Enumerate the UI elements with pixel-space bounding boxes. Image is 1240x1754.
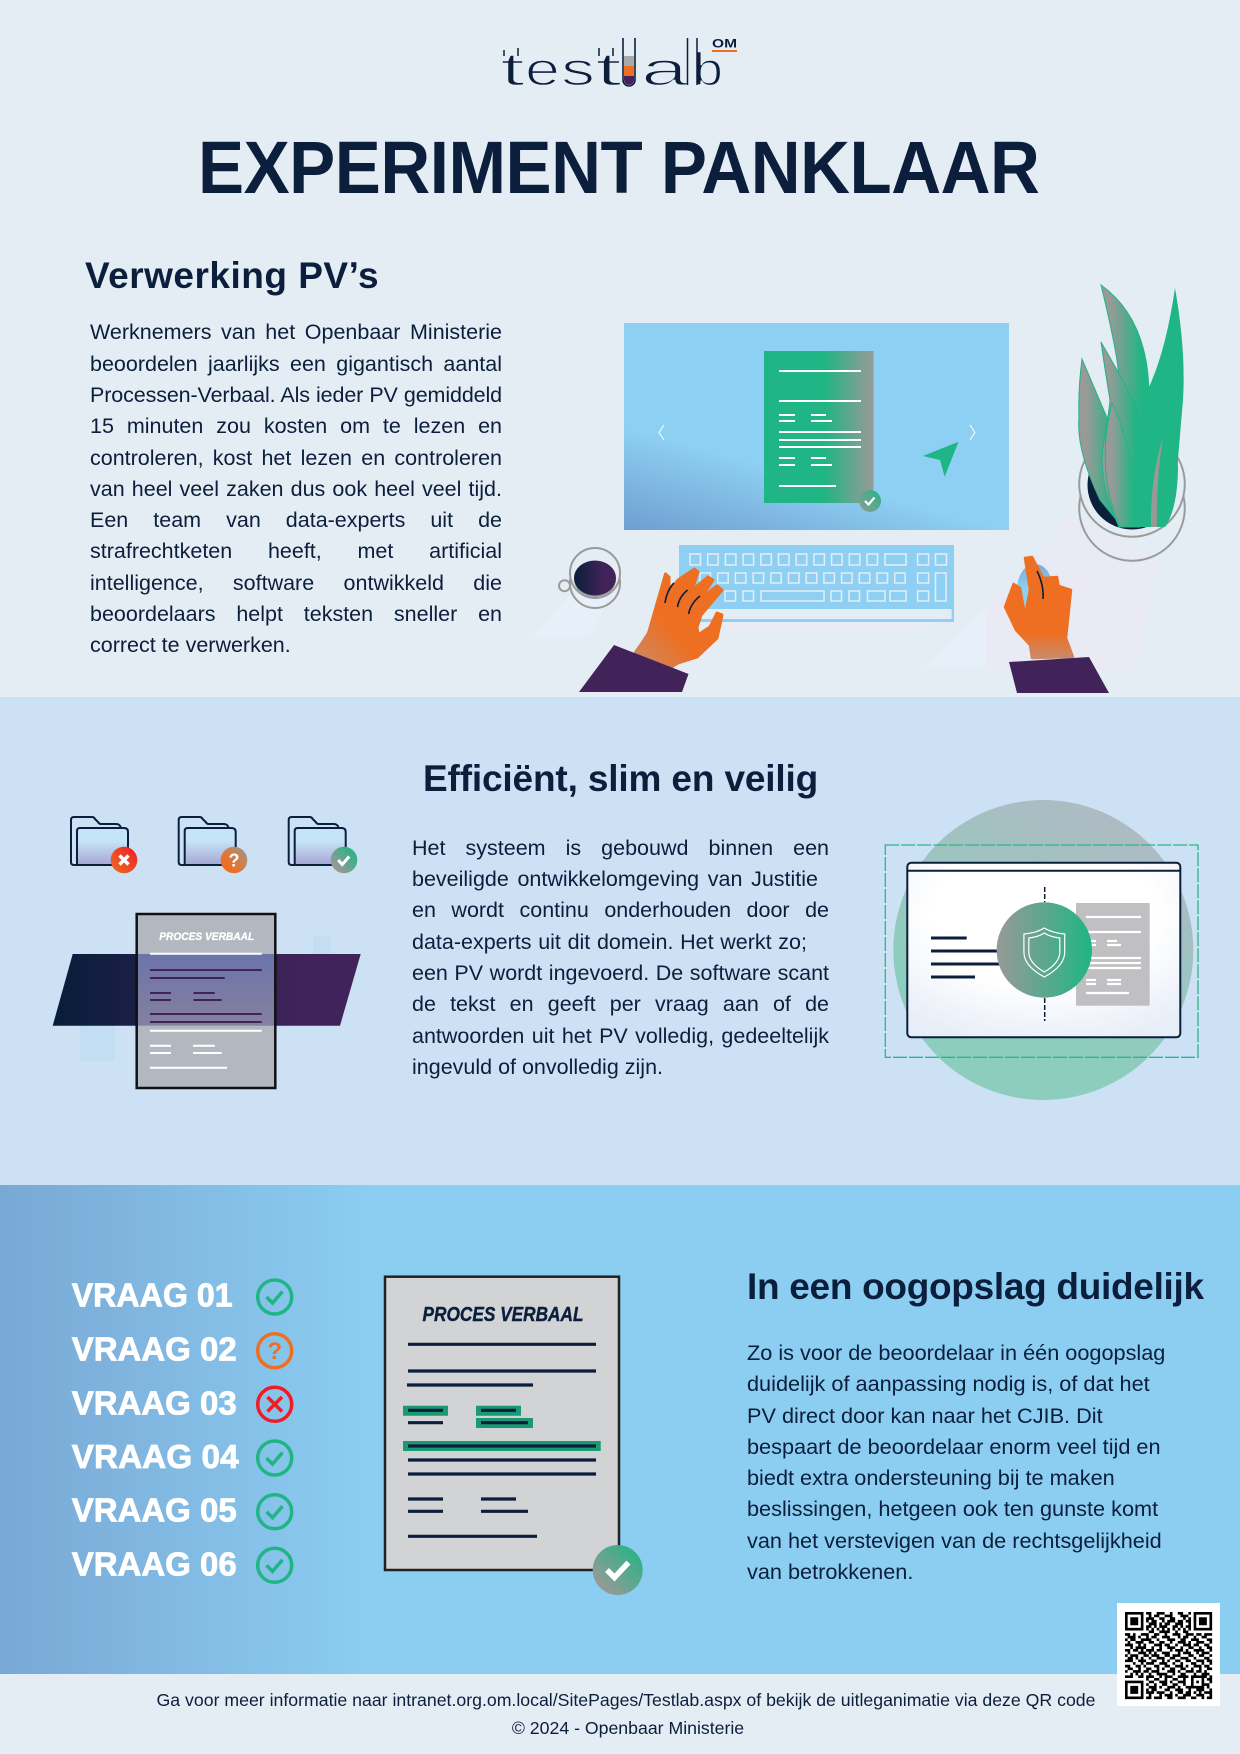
text block: beoordelaar: PV direct door kan naar het CJIB. Dit [747,1403,1103,1428]
panel: efficient, slim en veilig [0,697,1240,1185]
panel: footer [0,1674,1240,1754]
text block: beoordelaar: Zo is voor de beoordelaar in één oogopslag [747,1340,1165,1365]
proces verbaal with scanning band [53,914,361,1088]
text block: intro: strafrechtketen heeft, met artificial [90,539,502,563]
text block: intro: beoordelaars helpt teksten sneller en [90,602,502,626]
logo: testlab OM: s [561,43,595,95]
text block: systeem: Het systeem is gebouwd binnen een [412,836,829,860]
question checklist: VRAAG 06 [72,1545,237,1582]
title: EXPERIMENT PANKLAAR [198,126,1039,209]
logo: testlab OM: e [525,43,560,95]
text block: intro: van heel veel zaken dus ook heel veel tijd. [90,477,502,501]
approved check [593,1545,643,1595]
text block: intro: Processen-Verbaal. Als ieder PV gemiddeld [90,383,502,407]
logo: testlab OM: t [595,43,622,95]
left arm and hand [579,569,722,692]
text block: beoordelaar: van het verstevigen van de rechtsgelijkheid [747,1528,1162,1553]
logo: testlab OM: t [500,43,525,95]
illustration: desk with computer [558,284,1186,693]
text block: systeem: een PV wordt ingevoerd. De software scant [412,961,829,985]
proces verbaal with scanning band: PROCES VERBAAL [159,931,254,943]
logo: testlab OM: a [641,43,689,95]
text block: systeem: antwoorden uit het PV volledig, gedeeltelijk [412,1024,829,1048]
question checklist: VRAAG 03 [72,1384,237,1421]
proces verbaal document with highlights: PROCES VERBAAL [422,1304,584,1326]
text block: beoordelaar: bespaart de beoordelaar enorm veel tijd en [747,1434,1161,1459]
heading: In een oogopslag duidelijk: In een oogopslag duidelijk [747,1266,1204,1307]
logo: testlab OM [500,36,737,95]
text block: intro: 15 minuten zou kosten om te lezen en [90,414,502,438]
security illustration [885,800,1198,1100]
copyright: © 2024 - Openbaar Ministerie [512,1718,744,1738]
monitor [624,323,1009,530]
folder rejected [71,817,137,873]
text block: intro: beoordelen jaarlijks een gigantisch aantal [90,352,502,376]
keyboard [679,545,954,622]
question checklist [72,1277,292,1582]
question list and document [71,1275,643,1595]
text block: beoordelaar: biedt extra ondersteuning bij te maken [747,1465,1115,1490]
coffee cup [559,548,620,608]
question checklist: ? [267,1338,282,1365]
background shapes [532,516,1158,670]
cursor arrow [923,442,958,477]
text block: beoordelaar: beslissingen, hetgeen ook ten gunste komt [747,1496,1158,1521]
QR code [1117,1603,1220,1706]
proces verbaal document with highlights [385,1277,643,1595]
text block: intro: correct te verwerken. [90,633,291,657]
text block: systeem: data-experts uit dit domein. Het werkt zo; [412,930,807,954]
folder question: ? [228,850,240,870]
text block: systeem: ingevuld of onvolledig zijn. [412,1055,663,1079]
right arm, hand and mouse [1005,557,1109,693]
heading: Efficiënt, slim en veilig: Efficiënt, slim en veilig [423,758,818,799]
illustrations: folders, document and shield [52,800,1199,1100]
text block: beoordelaar [747,1340,1165,1584]
question checklist: VRAAG 04 [72,1438,239,1475]
text block: systeem: beveiligde ontwikkelomgeving van Justitie [412,867,818,891]
question checklist: VRAAG 01 [72,1277,233,1314]
text block: intro: controleren, kost het lezen en controleren [90,446,502,470]
text block: systeem: en wordt continu onderhouden door de [412,898,829,922]
document on screen [764,351,881,512]
logo: testlab OM: OM [712,36,737,50]
footer link text: Ga voor meer informatie naar intranet.org.om.local/SitePages/Testlab.aspx of bekijk de uitleganimatie via deze QR code [157,1690,1095,1710]
browser window [907,863,1180,1037]
text block: intro: Werknemers van het Openbaar Ministerie [90,320,502,344]
text block: systeem [412,836,829,1079]
panel: in een oogopslag duidelijk [0,1185,1240,1674]
plant [1079,285,1185,561]
text block: intro: Een team van data-experts uit de [90,508,502,532]
text block: systeem: de tekst en geeft per vraag aan of de [412,992,829,1016]
logo: testlab OM: b [693,43,723,95]
text block: intro [90,320,502,657]
folder approved [289,817,357,873]
text block: beoordelaar: duidelijk of aanpassing nodig is, of dat het [747,1371,1150,1396]
panel: intro verwerking PV's [0,0,1240,697]
question checklist: VRAAG 02 [72,1331,237,1368]
folder question [179,817,247,873]
question checklist: VRAAG 05 [72,1492,237,1529]
shield [997,902,1092,998]
text block: intro: intelligence, software ontwikkeld die [90,571,502,595]
heading: Verwerking PV's: Verwerking PV’s [85,255,379,296]
text block: beoordelaar: van betrokkenen. [747,1559,913,1584]
